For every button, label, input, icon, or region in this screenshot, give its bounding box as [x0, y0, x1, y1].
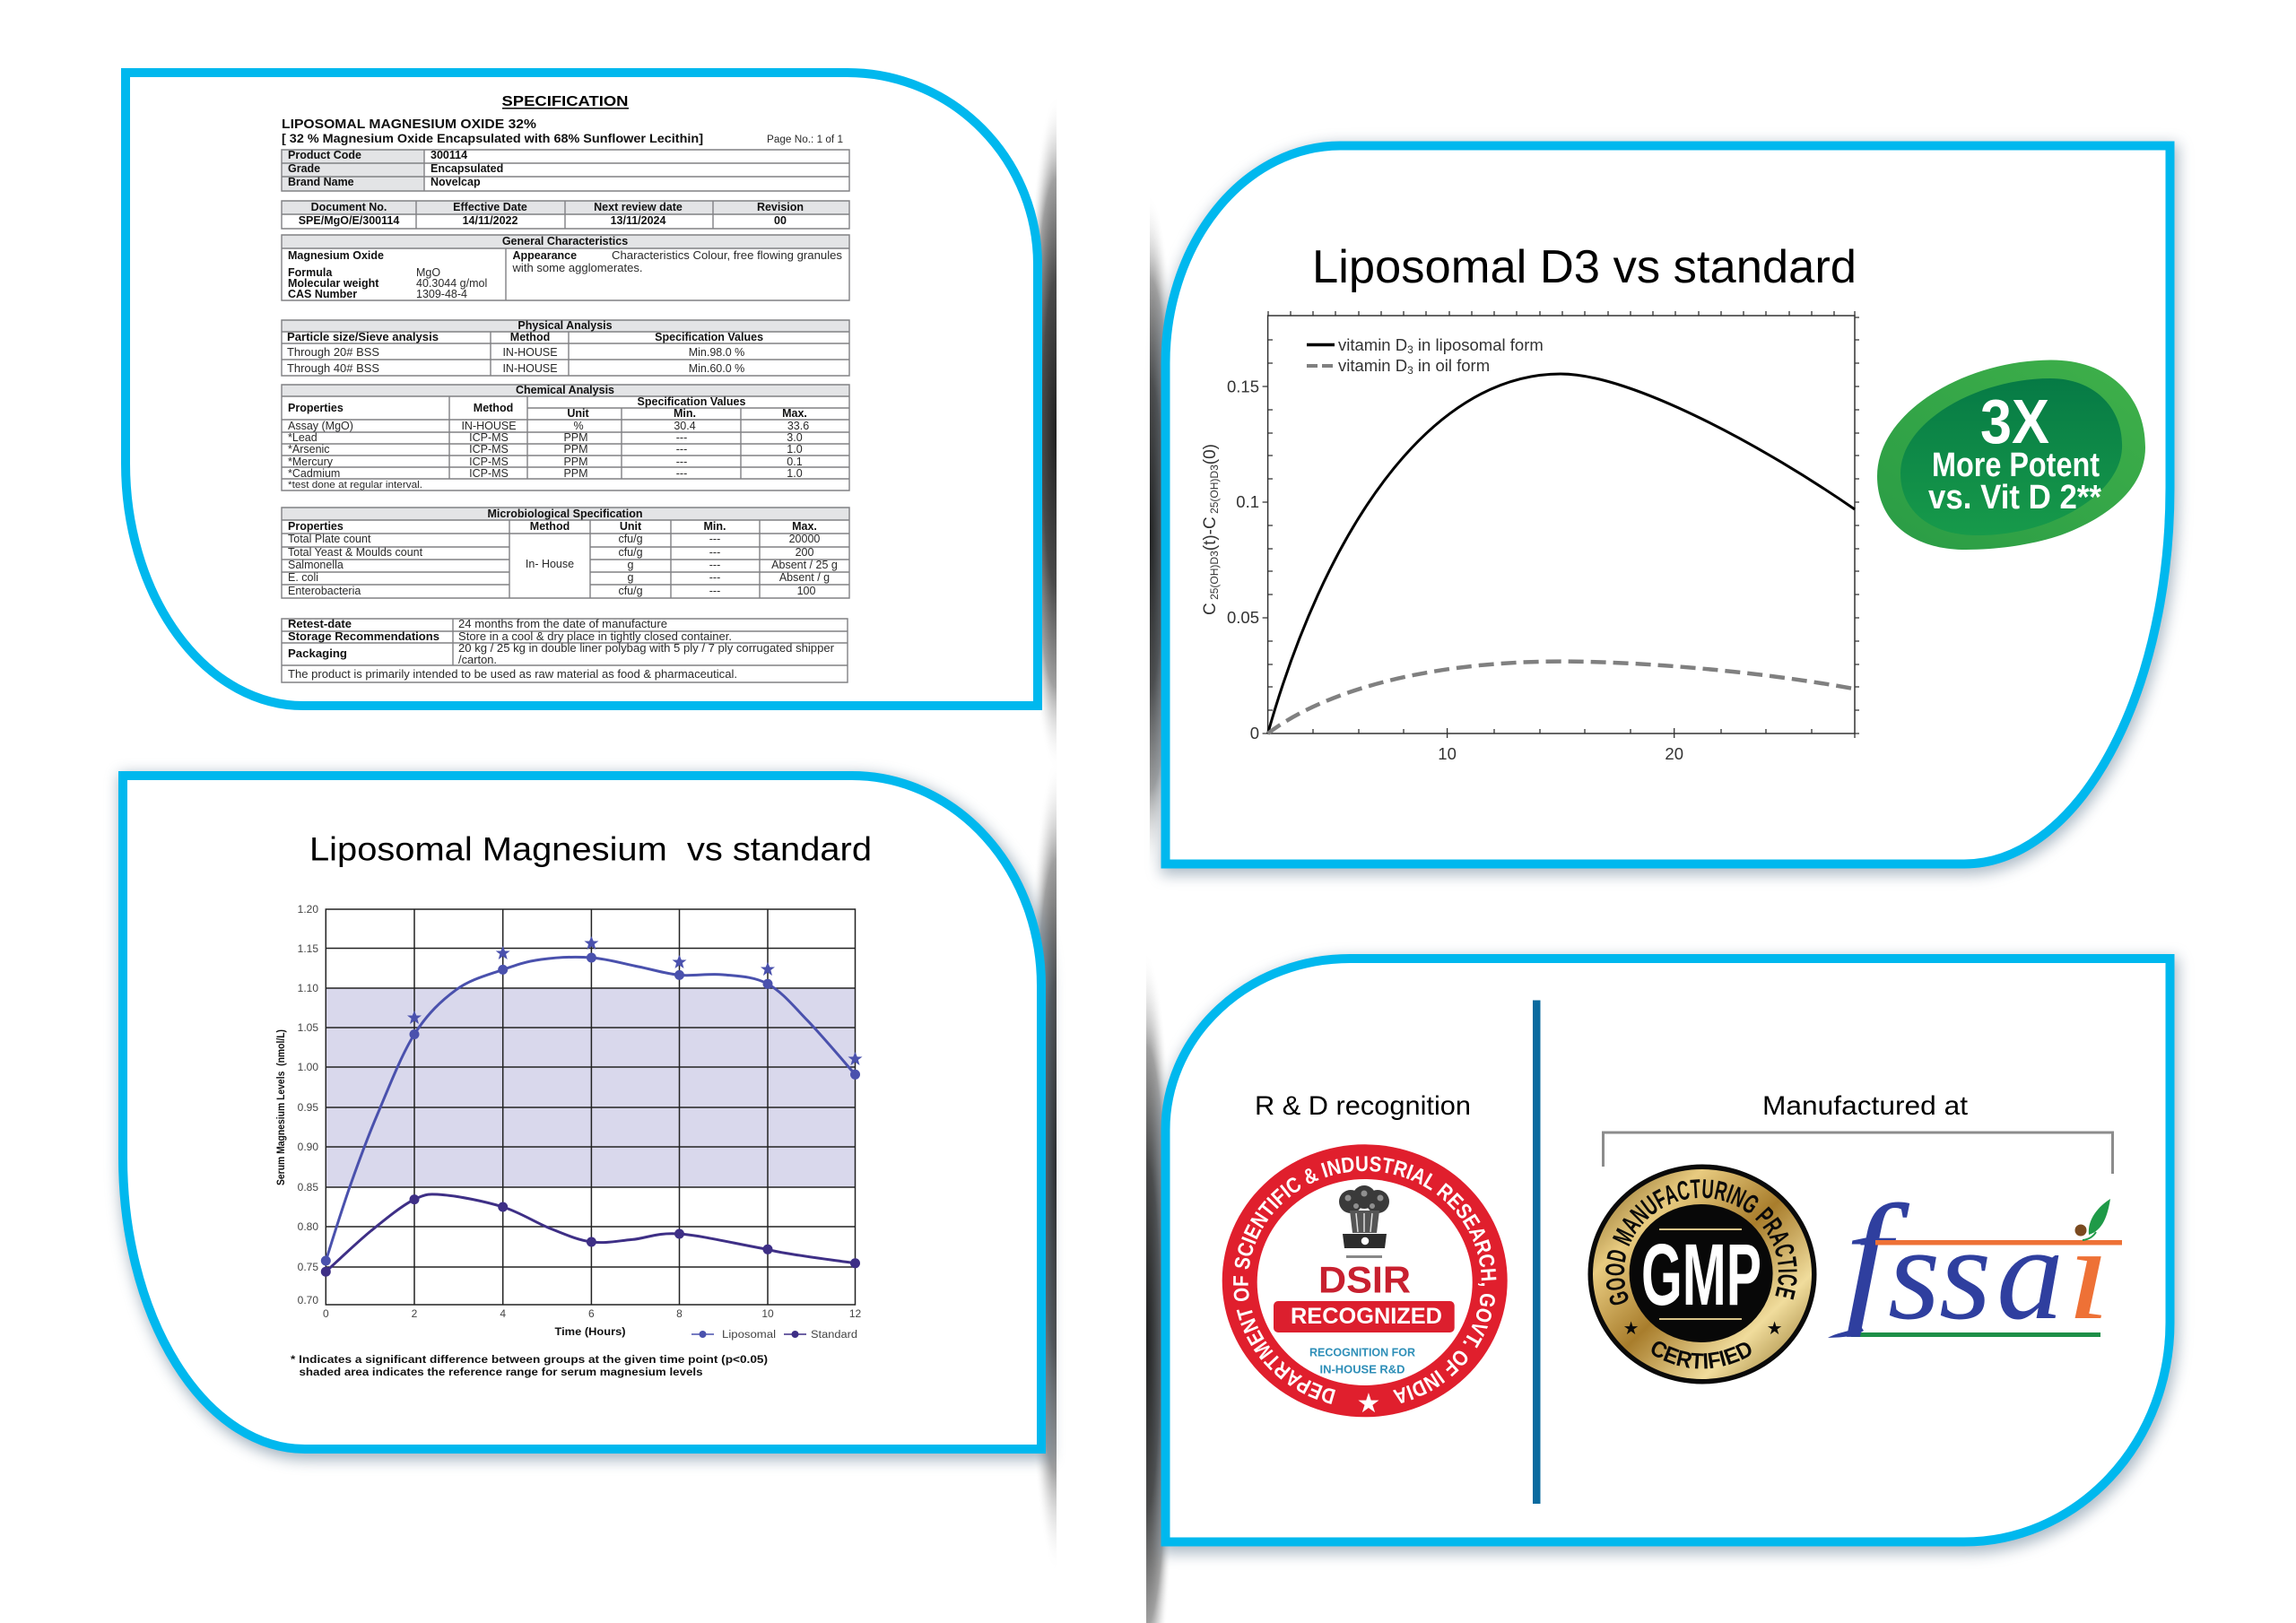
table: storage and packaging: Packaging — [288, 647, 347, 660]
badge: 3X more potent: 3X — [1980, 386, 2049, 456]
legend: 3 — [1407, 343, 1413, 356]
badge: 3X more potent — [1877, 360, 2145, 550]
table: chemical analysis: ICP-MS — [469, 456, 509, 468]
table: storage and packaging — [282, 618, 848, 682]
table: document control: Document No. — [311, 201, 387, 213]
x axis labels: 0 — [323, 1307, 329, 1320]
table: document control: 14/11/2022 — [463, 214, 517, 227]
table: physical analysis: Through 20# BSS — [287, 346, 379, 359]
table: general characteristics: Magnesium Oxide — [288, 249, 384, 262]
legend: in oil form — [1413, 356, 1490, 375]
spec heading: [ 32 % Magnesium Oxide Encapsulated with 68% Sunflower Lecithin] — [282, 131, 703, 145]
table: microbiological specification: 200 — [796, 546, 813, 559]
icon: fssai logo: f — [1845, 1175, 1910, 1338]
icon: GMP certified seal: CERTIFIED — [1652, 1341, 1752, 1368]
table: chemical analysis: PPM — [563, 431, 588, 444]
table: chemical analysis: ICP-MS — [469, 431, 509, 444]
badge: 3X more potent: More Potent — [1932, 447, 2100, 484]
table: microbiological specification: In- House — [526, 558, 574, 570]
table: microbiological specification: cfu/g — [618, 533, 643, 545]
liposomal series — [321, 952, 860, 1266]
table: microbiological specification — [282, 508, 849, 598]
x axis labels: 4 — [500, 1307, 506, 1320]
table: chemical analysis: Assay (MgO) — [288, 420, 353, 432]
table: microbiological specification: Unit — [620, 520, 642, 533]
icon: fssai logo: a — [1996, 1199, 2064, 1348]
table: microbiological specification: 20000 — [789, 533, 820, 545]
x axis tick labels: 20 — [1665, 744, 1683, 763]
magnesium chart heading: Liposomal Magnesium vs standard — [309, 830, 872, 868]
panel: liposomal D3 vs standard — [1166, 145, 2172, 868]
table: general characteristics: General Characteristics — [502, 235, 628, 247]
table: storage and packaging: The product is primarily intended to be used as raw material as food & pharmaceutical. — [288, 668, 737, 681]
panel: certifications — [1153, 949, 2187, 1562]
y axis tick labels: 0.1 — [1236, 492, 1259, 511]
icon: GMP certified seal: GOOD MANUFACTURING PRACTICE — [1605, 1179, 1797, 1306]
y axis labels: Serum Magnesium Levels (nmol/L) — [274, 1029, 287, 1185]
y axis labels: 0.85 — [298, 1181, 318, 1193]
table: physical analysis: Particle size/Sieve analysis — [287, 331, 439, 343]
table: chemical analysis: 1.0 — [787, 467, 803, 480]
table: physical analysis: Through 40# BSS — [287, 362, 379, 375]
y axis title: 25(OH)D3 — [1208, 464, 1221, 516]
table: microbiological specification: Absent / 25 g — [771, 559, 838, 571]
table: document control: 00 — [774, 214, 787, 227]
standard series — [321, 1194, 860, 1277]
table: microbiological specification: --- — [709, 571, 720, 584]
table: microbiological specification: g — [628, 571, 634, 584]
table: microbiological specification: cfu/g — [618, 585, 643, 597]
table: chemical analysis: PPM — [563, 443, 588, 456]
table: general characteristics — [282, 235, 849, 300]
y axis labels: 1.05 — [298, 1021, 318, 1034]
table: microbiological specification: --- — [709, 546, 720, 559]
table: chemical analysis: % — [573, 420, 584, 432]
badge: 3X more potent: vs. Vit D 2** — [1928, 479, 2101, 516]
x axis labels: 10 — [761, 1307, 774, 1320]
table: document control: Next review date — [594, 201, 683, 213]
icon: GMP certified seal: ★ — [1623, 1317, 1639, 1339]
icon: fssai logo: s — [1888, 1199, 1940, 1348]
table: chemical analysis: *Arsenic — [288, 443, 330, 456]
significance stars — [407, 936, 863, 1065]
table: chemical analysis: *Cadmium — [288, 467, 340, 480]
icon: GMP certified seal: GMP — [1641, 1226, 1761, 1324]
D3 line chart — [1201, 311, 1859, 763]
table: product details: Novelcap — [430, 176, 481, 188]
table: microbiological specification: E. coli — [288, 571, 318, 584]
table: microbiological specification: Max. — [792, 520, 817, 533]
table: chemical analysis: 30.4 — [674, 420, 696, 432]
vertical divider — [1533, 1001, 1541, 1504]
table: microbiological specification: cfu/g — [618, 546, 643, 559]
x axis labels: 8 — [676, 1307, 683, 1320]
R and D heading: R & D recognition — [1255, 1091, 1471, 1121]
y axis labels: 1.20 — [298, 903, 318, 916]
table: physical analysis: Physical Analysis — [517, 319, 613, 332]
icon: DSIR recognized seal: IN-HOUSE R&D — [1320, 1363, 1405, 1376]
icon: GMP certified seal: ★ — [1767, 1317, 1783, 1339]
table: physical analysis: Specification Values — [655, 331, 763, 343]
chart footnote — [291, 1355, 768, 1378]
y axis tick labels: 0.15 — [1227, 377, 1259, 396]
table: chemical analysis: --- — [676, 443, 687, 456]
table: microbiological specification: Total Yeast & Moulds count — [288, 546, 423, 559]
table: chemical analysis: 0.1 — [787, 456, 803, 468]
table: general characteristics: 1309-48-4 — [416, 288, 467, 300]
y axis labels: 1.10 — [298, 982, 318, 994]
y axis labels: 0.90 — [298, 1141, 318, 1153]
table: physical analysis: Method — [510, 331, 550, 343]
table: storage and packaging: 24 months from the date of manufacture — [458, 618, 667, 630]
y axis title: C — [1201, 603, 1220, 615]
panel: liposomal magnesium vs standard — [123, 776, 1044, 1454]
y axis labels — [274, 903, 318, 1306]
chart footnote: shaded area indicates the reference range for serum magnesium levels — [300, 1367, 703, 1378]
x axis tick labels: 10 — [1438, 744, 1457, 763]
table: microbiological specification: g — [628, 559, 634, 571]
icon: fssai logo: s — [1939, 1199, 1991, 1348]
table: general characteristics: MgO — [416, 266, 440, 279]
table: storage and packaging: 20 kg / 25 kg in double liner polybag with 5 ply / 7 ply corrugated shipper — [458, 642, 834, 655]
table: general characteristics: with some agglomerates. — [511, 262, 642, 274]
table: chemical analysis: Chemical Analysis — [516, 384, 614, 396]
table: microbiological specification: --- — [709, 585, 720, 597]
table: chemical analysis: Unit — [567, 407, 589, 420]
table: microbiological specification: 100 — [797, 585, 815, 597]
table: document control: 13/11/2024 — [611, 214, 665, 227]
legend: 3 — [1407, 364, 1413, 377]
table: microbiological specification: Properties — [288, 520, 344, 533]
table: storage and packaging: Store in a cool & dry place in tightly closed container. — [458, 630, 732, 643]
legend: vitamin D — [1338, 335, 1407, 354]
table: microbiological specification: Total Plate count — [288, 533, 371, 545]
table: chemical analysis — [282, 384, 849, 490]
bracket — [1604, 1133, 2113, 1174]
table: physical analysis: Min.60.0 % — [689, 362, 744, 375]
table: chemical analysis: Max. — [782, 407, 807, 420]
table: physical analysis: IN-HOUSE — [502, 362, 558, 375]
table: chemical analysis: Min. — [674, 407, 696, 420]
table: chemical analysis: Properties — [288, 402, 344, 414]
y axis title: (0) — [1201, 444, 1220, 464]
table: microbiological specification: --- — [709, 533, 720, 545]
x axis tick labels — [1438, 744, 1683, 763]
table: microbiological specification: Method — [530, 520, 570, 533]
panel: specification sheet — [126, 73, 1038, 706]
magnesium line chart — [274, 903, 863, 1341]
table: product details: 300114 — [430, 149, 467, 161]
y axis tick labels — [1227, 377, 1259, 742]
table: chemical analysis: --- — [676, 456, 687, 468]
spec heading: Page No.: 1 of 1 — [767, 135, 843, 145]
y axis title: 25(OH)D3 — [1208, 551, 1221, 603]
y axis labels: 0.70 — [298, 1294, 318, 1306]
table: chemical analysis: PPM — [563, 456, 588, 468]
table: physical analysis: Min.98.0 % — [689, 346, 744, 359]
spec heading — [282, 94, 843, 145]
table: chemical analysis: --- — [676, 431, 687, 444]
icon: DSIR recognized seal: ★ — [1357, 1388, 1380, 1419]
y axis labels: 0.75 — [298, 1261, 318, 1273]
icon: DSIR recognized seal: RECOGNITION FOR — [1309, 1346, 1416, 1359]
icon: fssai logo: ı — [2066, 1198, 2111, 1348]
table: chemical analysis: Specification Values — [638, 395, 745, 408]
icon: fssai logo — [1828, 1175, 2122, 1348]
table: document control — [282, 201, 849, 229]
table: storage and packaging: /carton. — [458, 654, 497, 666]
table: chemical analysis: ICP-MS — [469, 443, 509, 456]
table: general characteristics: Molecular weight — [288, 277, 379, 290]
table: microbiological specification: Enterobacteria — [288, 585, 361, 597]
y axis labels: 1.00 — [298, 1061, 318, 1073]
table: product details — [282, 149, 849, 191]
table: general characteristics: 40.3044 g/mol — [416, 277, 487, 290]
table: chemical analysis: 33.6 — [787, 420, 809, 432]
table: chemical analysis: --- — [676, 467, 687, 480]
table: physical analysis — [282, 319, 849, 376]
table: general characteristics: Appearance — [513, 249, 577, 262]
table: document control: SPE/MgO/E/300114 — [299, 214, 399, 227]
y axis title: (t)-C — [1201, 516, 1220, 551]
table: product details: Encapsulated — [430, 162, 503, 175]
table: microbiological specification: --- — [709, 559, 720, 571]
manufactured at heading: Manufactured at — [1762, 1091, 1969, 1121]
spec heading: LIPOSOMAL MAGNESIUM OXIDE 32% — [282, 117, 536, 132]
legend: Liposomal — [722, 1330, 776, 1341]
spec heading: SPECIFICATION — [502, 94, 628, 109]
table: microbiological specification: Min. — [703, 520, 726, 533]
icon: DSIR recognized seal: DEPARTMENT OF SCIENTIFIC & INDUSTRIAL RESEARCH, GOVT. OF INDIA — [1233, 1156, 1496, 1404]
table: chemical analysis: 3.0 — [787, 431, 803, 444]
y axis labels: 1.15 — [298, 942, 318, 955]
table: storage and packaging: Retest-date — [288, 618, 352, 630]
x axis labels: 2 — [412, 1307, 418, 1320]
legend: vitamin D — [1338, 356, 1407, 375]
x axis labels: Time (Hours) — [554, 1327, 626, 1338]
table: chemical analysis: PPM — [563, 467, 588, 480]
icon: DSIR recognized seal: DSIR — [1318, 1259, 1411, 1301]
table: chemical analysis: ICP-MS — [469, 467, 509, 480]
legend: Standard — [811, 1330, 857, 1341]
table: chemical analysis: 1.0 — [787, 443, 803, 456]
table: storage and packaging: Storage Recommendations — [288, 630, 439, 643]
table: microbiological specification: Salmonella — [288, 559, 344, 571]
table: chemical analysis: *test done at regular interval. — [288, 480, 422, 490]
table: chemical analysis: Method — [474, 402, 513, 414]
y axis tick labels: 0 — [1250, 724, 1259, 742]
table: document control: Effective Date — [453, 201, 527, 213]
icon: DSIR recognized seal: RECOGNIZED — [1291, 1304, 1442, 1329]
table: chemical analysis: *Mercury — [288, 456, 334, 468]
x axis labels: 12 — [849, 1307, 861, 1320]
icon: national emblem — [1339, 1185, 1389, 1258]
table: physical analysis: IN-HOUSE — [502, 346, 558, 359]
table: microbiological specification: Microbiological Specification — [488, 508, 642, 520]
legend: in liposomal form — [1413, 335, 1544, 354]
table: general characteristics: CAS Number — [288, 288, 357, 300]
legend — [691, 1330, 857, 1341]
icon: GMP certified seal — [1587, 1164, 1817, 1384]
y axis labels: 0.80 — [298, 1220, 318, 1233]
table: microbiological specification: Absent / g — [779, 571, 830, 584]
x axis labels — [323, 1307, 861, 1338]
table: product details: Grade — [288, 162, 320, 175]
chart footnote: * Indicates a significant difference between groups at the given time point (p<0.05) — [291, 1355, 768, 1366]
oil form dashed curve — [1268, 662, 1855, 733]
y axis tick labels: 0.05 — [1227, 608, 1259, 627]
table: document control: Revision — [757, 201, 804, 213]
table: chemical analysis: *Lead — [288, 431, 317, 444]
table: product details: Product Code — [288, 149, 361, 161]
x axis labels: 6 — [588, 1307, 595, 1320]
table: product details: Brand Name — [288, 176, 354, 188]
liposomal curve — [1268, 374, 1855, 733]
side shadow strips — [1024, 94, 1180, 1623]
legend — [1307, 335, 1544, 377]
D3 chart heading: Liposomal D3 vs standard — [1312, 241, 1857, 293]
table: general characteristics: Characteristics Colour, free flowing granules — [612, 249, 842, 262]
y axis labels: 0.95 — [298, 1101, 318, 1114]
table: general characteristics: Formula — [288, 266, 333, 279]
table: chemical analysis: IN-HOUSE — [461, 420, 517, 432]
